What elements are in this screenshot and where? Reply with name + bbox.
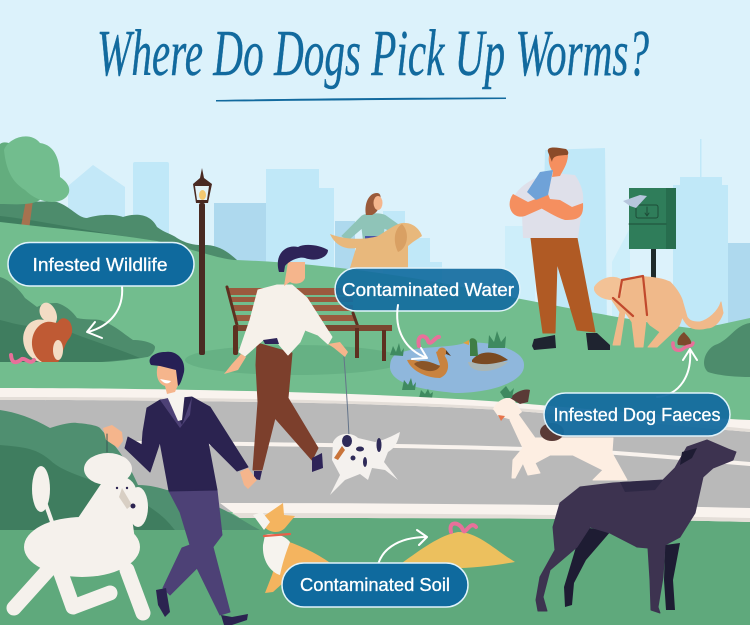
- squirrel: [11, 303, 72, 362]
- arrow: to soil: [377, 530, 427, 572]
- man in jacket: [103, 352, 257, 625]
- soil worm: [451, 524, 476, 532]
- woman with golden retriever: [330, 193, 422, 268]
- shoes: [532, 333, 610, 350]
- label: infested dog faeces: Infested Dog Faeces: [554, 405, 720, 425]
- worm in pond: [418, 336, 439, 346]
- label: infested wildlife: [8, 242, 194, 338]
- trousers: [156, 490, 248, 625]
- right shrub: [704, 323, 750, 377]
- arrow: to faeces: [657, 349, 697, 397]
- main lawn: [0, 222, 750, 530]
- tree: [0, 136, 69, 237]
- pond: [390, 331, 524, 398]
- city skyline: [68, 139, 750, 345]
- duck: brown: [407, 348, 451, 378]
- front left bush: [0, 410, 260, 530]
- spotted dog: [330, 432, 400, 495]
- walking woman: [224, 245, 348, 480]
- arrow: to pond: [397, 305, 427, 359]
- label: contaminated water: [335, 268, 520, 359]
- soil pile: [402, 524, 515, 568]
- lower curb: [220, 503, 750, 522]
- title underline: [216, 98, 506, 102]
- shrub behind squirrel: [0, 277, 155, 362]
- label: contaminated soil: Contaminated Soil: [300, 575, 450, 595]
- back hill: [0, 201, 237, 290]
- label: contaminated soil: [282, 530, 468, 607]
- lamp post: [193, 168, 212, 355]
- dog leash: [344, 357, 349, 438]
- label: contaminated water: Contaminated Water: [342, 280, 514, 300]
- black dog: [536, 440, 736, 613]
- lower lawn: [0, 518, 750, 625]
- grass tufts: [390, 331, 506, 398]
- road centre line: [132, 441, 750, 466]
- duck: mallard: [463, 338, 508, 371]
- dog pooping: [594, 276, 723, 347]
- standing man with bag: [510, 147, 610, 350]
- bag dispenser: [623, 188, 676, 279]
- running white dog: [493, 386, 627, 480]
- road: [0, 398, 750, 512]
- label: infested dog faeces: [544, 349, 730, 436]
- upper curb: [0, 388, 750, 432]
- arrow: to squirrel: [87, 286, 122, 338]
- bench: [227, 287, 392, 361]
- hands: [103, 425, 257, 489]
- lawn shadow under bench: [185, 345, 405, 375]
- poodle: [14, 434, 148, 613]
- corgi: [253, 503, 333, 593]
- poop with worm: [673, 332, 693, 350]
- jacket: [125, 397, 248, 491]
- label: infested wildlife: Infested Wildlife: [32, 255, 168, 275]
